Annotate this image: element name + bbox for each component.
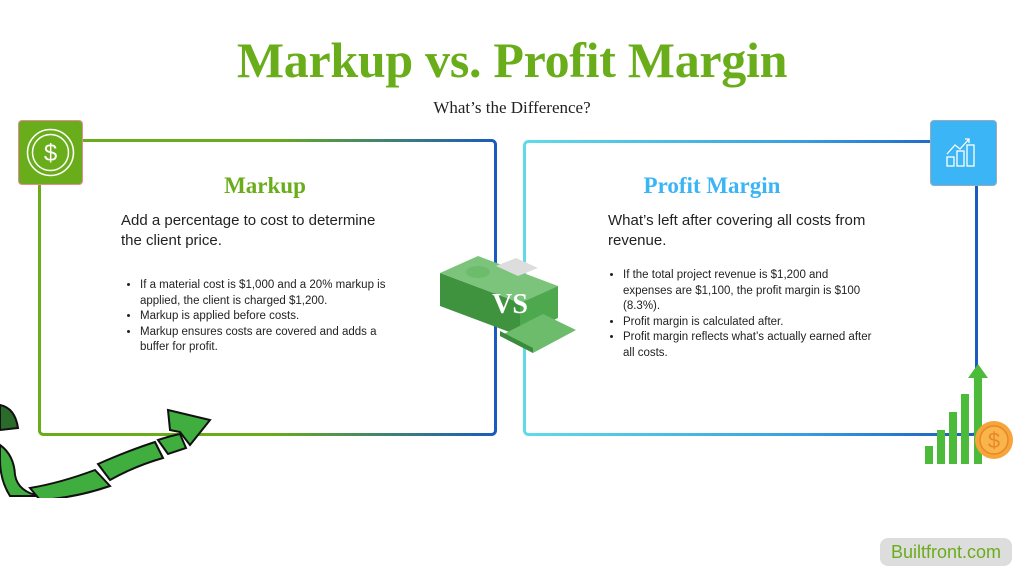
list: markup bullets (127, 279, 386, 353)
text: profit margin definition: What’s left after covering all costs from revenue. (608, 212, 865, 249)
icon: chart badge (930, 120, 997, 186)
panel: markup (38, 139, 497, 436)
icon: growth chart with coin (925, 364, 1013, 464)
list: profit margin bullets: Profit margin reflects what’s actually earned after all costs. (623, 331, 871, 358)
icon: vs money stack (440, 256, 576, 353)
title: Markup vs. Profit Margin (237, 32, 787, 88)
list: profit margin bullets: Profit margin is calculated after. (623, 316, 783, 328)
list: profit margin bullets: If the total project revenue is $1,200 and expenses are $1,100, the profit margin is $100 (8.3%). (623, 269, 860, 312)
icon: vs money stack: VS (492, 289, 528, 320)
footer: brand badge (880, 538, 1012, 566)
text: markup definition: Add a percentage to cost to determine the client price. (121, 212, 375, 249)
list: markup bullets: Markup ensures costs are covered and adds a buffer for profit. (140, 326, 377, 353)
icon: money arrow (0, 404, 212, 498)
footer: brand badge: Builtfront.com (891, 542, 1001, 562)
heading: profit margin: Profit Margin (644, 173, 780, 198)
icon: dollar badge: $ (44, 140, 57, 167)
list: markup bullets: If a material cost is $1,000 and a 20% markup is applied, the client is charged $1,200. (140, 279, 385, 306)
list: markup bullets: Markup is applied before costs. (140, 310, 299, 322)
panel: profit margin (523, 140, 978, 436)
icon: dollar badge (18, 120, 83, 185)
heading: markup: Markup (224, 173, 306, 198)
icon: growth chart with coin: $ (988, 428, 1000, 453)
subtitle: What’s the Difference? (433, 98, 591, 117)
list: profit margin bullets (610, 269, 872, 358)
